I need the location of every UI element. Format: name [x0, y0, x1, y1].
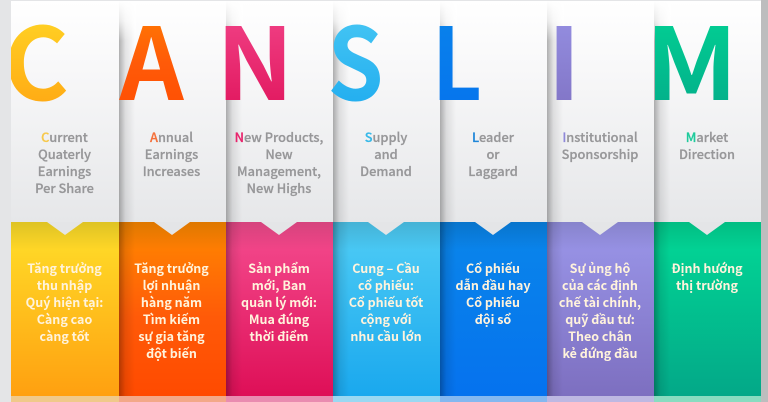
description I: Theo chân — [568, 326, 632, 345]
description N: Sản phẩm — [248, 258, 310, 277]
caption I: Sponsorship — [562, 144, 638, 163]
caption N: New Highs — [247, 178, 311, 197]
caption M: Direction — [679, 144, 735, 163]
caption N: New — [265, 144, 293, 163]
caption C: Earnings — [38, 161, 91, 180]
bottom strip A — [119, 396, 226, 402]
caption L: Leader — [472, 127, 514, 146]
description A: Tìm kiếm — [143, 309, 200, 328]
description S: cổ phiếu: — [358, 275, 414, 294]
right edge shadow — [761, 0, 768, 402]
description S: cộng với — [360, 309, 412, 328]
description L: Cổ phiếu — [466, 258, 520, 277]
color band L — [440, 222, 547, 396]
bottom strip N — [226, 396, 333, 402]
description N: quản lý mới: — [241, 292, 317, 311]
bottom strip C — [11, 396, 119, 402]
description A: lợi nhuận — [143, 275, 200, 294]
description I: Sự ủng hộ — [570, 258, 631, 277]
bottom strip M — [654, 396, 761, 402]
description N: Mua đúng — [249, 309, 310, 328]
description N: mới, Ban — [252, 275, 306, 294]
description S: Cung – Cầu — [352, 258, 420, 277]
panel: M - Market Direction — [645, 0, 761, 402]
description A: Tăng trưởng — [134, 258, 209, 277]
description M: thị trường — [676, 275, 738, 294]
color band N — [226, 222, 333, 396]
description A: sự gia tăng — [138, 326, 205, 345]
description A: đột biến — [146, 343, 197, 362]
caption M: Market — [686, 127, 728, 146]
description I: của các định — [562, 275, 638, 294]
caption N: New Products, — [235, 127, 323, 146]
description I: chế tài chính, — [559, 292, 641, 311]
bottom strip I — [547, 396, 654, 402]
panel: C - Current Quarterly Earnings — [3, 0, 119, 402]
panel: A - Annual Earnings — [118, 0, 226, 402]
color band I — [547, 222, 654, 396]
caption S: and — [374, 144, 398, 163]
bottom strip S — [333, 396, 440, 402]
caption S: Supply — [365, 127, 407, 146]
caption L: or — [486, 144, 500, 163]
description C: Càng cao — [37, 309, 92, 328]
description C: càng tốt — [40, 326, 90, 345]
panel: L - Leader or Laggard — [432, 0, 547, 402]
caption A: Annual — [150, 127, 193, 146]
description C: Tăng trưởng — [27, 258, 102, 277]
caption S: Demand — [360, 161, 412, 180]
description C: thu nhập — [37, 275, 92, 294]
description C: Quý hiện tại: — [26, 292, 103, 311]
panel: I - Institutional Sponsorship — [547, 0, 654, 402]
description S: Cổ phiếu tốt — [349, 292, 424, 311]
caption I: Institutional — [562, 127, 638, 146]
color band C — [11, 222, 119, 396]
caption C: Current — [41, 127, 88, 146]
description M: Định hướng — [671, 258, 743, 277]
caption A: Earnings — [145, 144, 198, 163]
color band S — [333, 222, 440, 396]
description I: kẻ đứng đầu — [562, 343, 638, 362]
caption A: Increases — [143, 161, 200, 180]
color band M — [654, 222, 761, 396]
caption L: Laggard — [468, 161, 518, 180]
panel: N - New Products — [216, 0, 333, 402]
panel: S - Supply and Demand — [327, 0, 440, 402]
description L: Cổ phiếu — [466, 292, 520, 311]
bottom strip L — [440, 396, 547, 402]
description A: hàng năm — [141, 292, 202, 311]
description I: quỹ đầu tư: — [565, 309, 635, 328]
description L: đội sổ — [475, 309, 511, 328]
caption C: Quaterly — [38, 144, 91, 163]
description L: dẫn đầu hay — [455, 275, 531, 294]
description N: thời điểm — [250, 326, 308, 345]
caption C: Per Share — [35, 178, 94, 197]
caption N: Management, — [237, 161, 321, 180]
description S: nhu cầu lớn — [350, 326, 422, 345]
color band A — [119, 222, 226, 396]
